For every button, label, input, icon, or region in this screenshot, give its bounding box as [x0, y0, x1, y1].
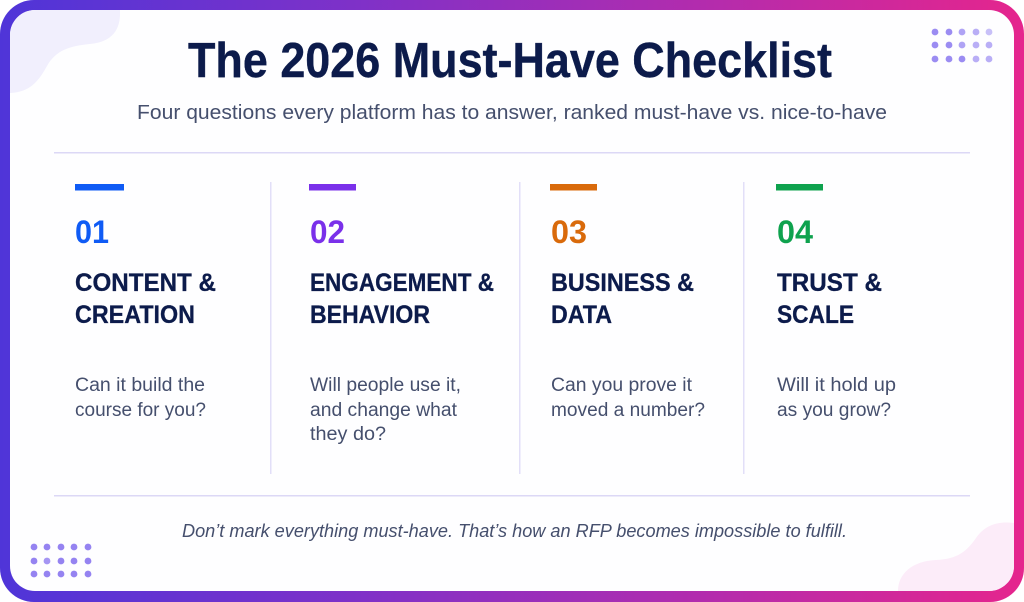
- heading: CREATION: [75, 301, 195, 329]
- accent bar: [776, 184, 823, 190]
- dots: top right: [932, 29, 992, 62]
- question: course for you?: [75, 400, 206, 421]
- question: moved a number?: [551, 400, 705, 421]
- heading: BUSINESS &: [551, 269, 694, 297]
- question: as you grow?: [777, 400, 891, 421]
- heading: BEHAVIOR: [310, 301, 430, 329]
- number: 02: [310, 214, 345, 250]
- title: The 2026 Must-Have Checklist: [188, 34, 832, 88]
- top divider: [54, 152, 970, 154]
- question: Can it build the: [75, 375, 205, 396]
- accent bar: [75, 184, 124, 190]
- heading: DATA: [551, 301, 612, 329]
- question: Will it hold up: [777, 375, 896, 396]
- number: 04: [777, 214, 813, 250]
- accent bar: [550, 184, 597, 190]
- column 3: business and data: [550, 184, 705, 421]
- number: 03: [551, 214, 587, 250]
- question: Will people use it,: [310, 375, 461, 396]
- dots: bottom left: [31, 544, 91, 577]
- column 4: trust and scale: [776, 184, 896, 421]
- decorative blob: bottom right: [898, 523, 1014, 591]
- heading: SCALE: [777, 301, 854, 329]
- decorative blob: top left: [10, 10, 120, 93]
- subtitle: Four questions every platform has to answer, ranked must-have vs. nice-to-have: [137, 101, 887, 124]
- heading: CONTENT &: [75, 269, 216, 297]
- question: Can you prove it: [551, 375, 693, 396]
- column dividers: [270, 182, 744, 474]
- question: they do?: [310, 424, 386, 445]
- column 1: content and creation: [75, 184, 216, 421]
- footer note: Don’t mark everything must-have. That’s how an RFP becomes impossible to fulfill.: [182, 521, 847, 541]
- heading: ENGAGEMENT &: [310, 269, 494, 297]
- accent bar: [309, 184, 356, 190]
- column 2: engagement and behavior: [309, 184, 494, 445]
- number: 01: [75, 214, 109, 250]
- heading: TRUST &: [777, 269, 882, 297]
- bottom divider: [54, 495, 970, 496]
- question: and change what: [310, 400, 458, 421]
